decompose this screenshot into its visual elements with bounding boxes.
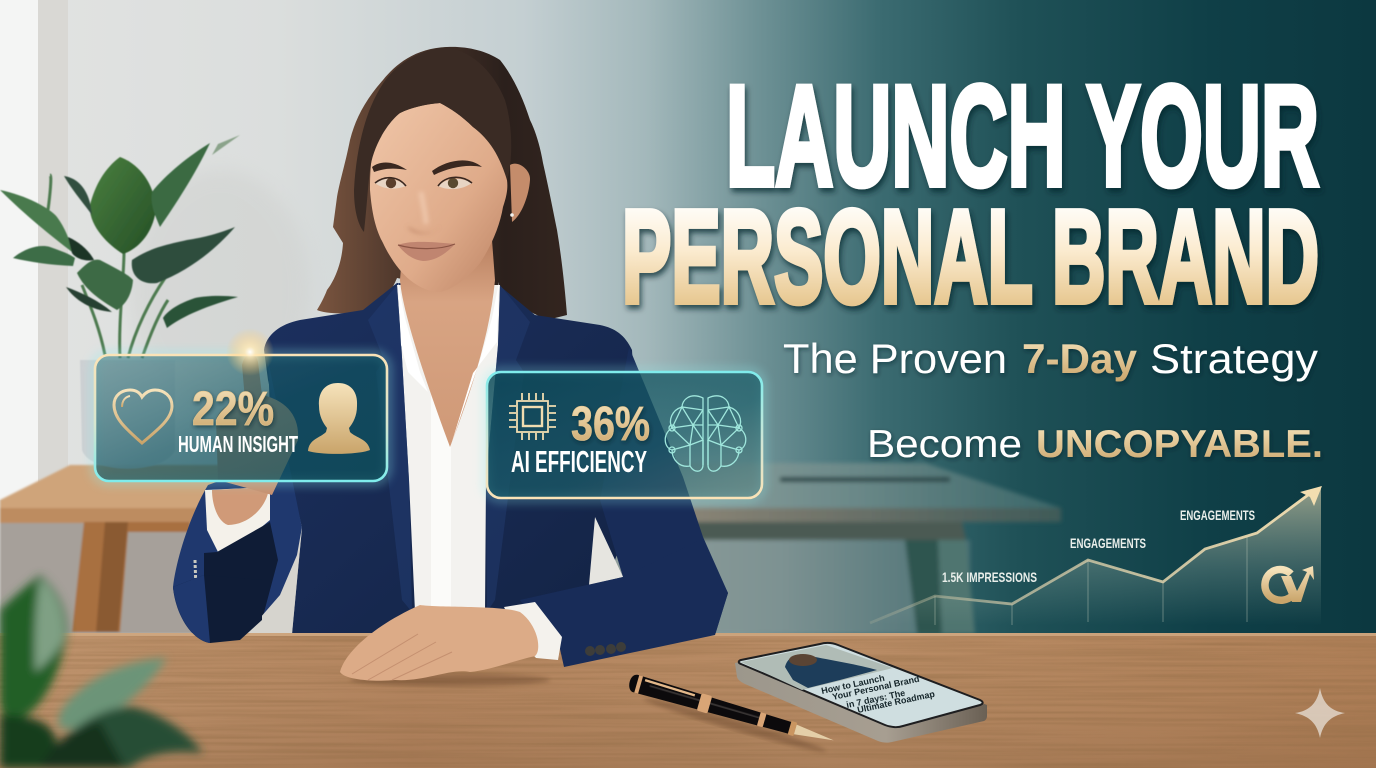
tagline: become uncopyable: Become (867, 423, 1022, 466)
person: shirt cuff on table (504, 602, 562, 660)
background: soft shadow on wall (130, 170, 310, 410)
tagline: become uncopyable (867, 423, 1323, 466)
person: mouth (398, 242, 455, 261)
label: engagements 2: ENGAGEMENTS (1180, 507, 1255, 523)
pen body, cap, bands and nib (627, 673, 836, 749)
plant: potted plant by window (0, 135, 240, 469)
touch point flare (226, 328, 274, 376)
card: AI efficiency (486, 371, 763, 499)
chart line (870, 492, 1312, 623)
person: hair back (317, 47, 567, 320)
chart area (870, 486, 1321, 625)
person: eyebrows (372, 160, 482, 175)
subtitle: the proven 7-day strategy: The Proven (783, 335, 1007, 382)
subtitle: the proven 7-day strategy: 7-Day (1022, 335, 1138, 382)
person: eyes (375, 177, 472, 189)
person: earring (510, 213, 514, 217)
phone headline: Your Personal Brand (831, 674, 920, 702)
icon: heart (114, 390, 172, 443)
person: face (370, 103, 507, 292)
person: neck and chest (400, 240, 495, 447)
sparkle mark (1295, 688, 1345, 738)
table top (0, 633, 1376, 768)
phone headline: Ultimate Roadmap (856, 689, 936, 715)
label: AI efficiency: AI EFFICIENCY (511, 444, 647, 479)
subtitle: the proven 7-day strategy (783, 335, 1318, 382)
icon: microchip (509, 393, 556, 440)
growth chart (870, 486, 1322, 625)
stat: 22 percent: 22% (192, 383, 274, 436)
person: sleeve over table (173, 540, 728, 667)
background: distant table on the left (0, 465, 300, 634)
foreground plant (0, 575, 203, 768)
background: gap between body and sleeve (246, 527, 302, 634)
phone headline: in 7 days: The (845, 688, 906, 710)
icon: person silhouette (308, 383, 370, 454)
person: raised hand (216, 354, 298, 495)
background: window and curtain (0, 0, 68, 500)
chart arrow head (1300, 486, 1322, 506)
person: hair front (354, 47, 511, 232)
card 1 glow (94, 354, 388, 482)
person: torso and blazer (264, 283, 640, 634)
pen (627, 673, 836, 756)
card 2 glow (486, 371, 763, 499)
person: raised arm and cuff (173, 360, 302, 643)
subtitle: the proven 7-day strategy: Strategy (1150, 335, 1318, 382)
background: distant desk on the right (590, 463, 1061, 634)
stat: 36 percent: 36% (571, 398, 650, 451)
label: human insight: HUMAN INSIGHT (178, 431, 298, 457)
phone headline: How to Launch (820, 673, 886, 696)
gap between body and right arm (589, 517, 623, 585)
card 2 panel (487, 372, 762, 498)
card: human insight (94, 354, 388, 482)
phone (735, 643, 987, 743)
phone screen (739, 643, 983, 727)
phone headline (820, 673, 936, 715)
icon: neural brain (665, 396, 746, 471)
card 1 panel (95, 355, 387, 481)
label: impressions: 1.5K IMPRESSIONS (942, 569, 1037, 585)
logo: CV mark (1265, 566, 1314, 602)
label: engagements 1: ENGAGEMENTS (1070, 535, 1146, 551)
tagline: become uncopyable: UNCOPYABLE. (1036, 423, 1323, 466)
person: shirt collar (398, 282, 499, 445)
person: hand on table (340, 605, 550, 686)
phone screen photo (741, 645, 893, 690)
person: arm resting on table (520, 347, 728, 667)
person: ear (510, 164, 530, 222)
person: nose (407, 192, 440, 234)
